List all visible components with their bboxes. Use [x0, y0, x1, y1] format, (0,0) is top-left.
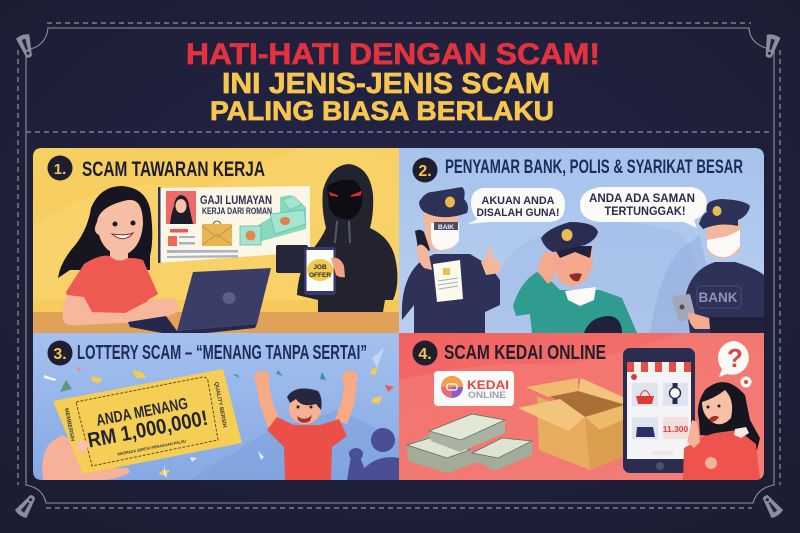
officer with bank uniform: BANK: [698, 290, 738, 305]
job advert card: GAJI LUMAYAN: [200, 193, 272, 207]
smartphone: 11.300: [663, 424, 689, 434]
tablet: job offer: OFFER: [309, 272, 331, 279]
online shop logo: ONLINE: [468, 390, 506, 401]
money stacks: [407, 414, 532, 473]
icon: warning top right: [762, 33, 781, 59]
heading: [48, 340, 367, 366]
laptop: [128, 268, 271, 336]
panel: scam tawaran kerja: [33, 148, 399, 336]
officer with phone: BAIK: [438, 224, 454, 231]
winning ticket: RM 1,000,000!: [86, 407, 210, 453]
heading: SCAM TAWARAN KERJA: [82, 158, 265, 181]
panel: lottery scam: [33, 333, 399, 480]
title: HATI-HATI DENGAN SCAM!: [186, 38, 600, 71]
cardboard box: [518, 378, 623, 470]
heading: [412, 340, 606, 366]
winning ticket: MEMBERSIH: [63, 408, 75, 442]
officer with bank uniform: [671, 199, 764, 333]
speech bubble: saman: [580, 187, 707, 228]
heading: [412, 157, 743, 182]
question mark bubble: [718, 341, 752, 388]
speech bubble: akuan: DISALAH GUNA!: [476, 207, 560, 219]
winning ticket: QUALITY BERSIH: [213, 381, 227, 428]
title: [186, 38, 600, 126]
job advert card: KERJA DARI ROMAN: [202, 206, 272, 216]
heading: 3.: [53, 346, 67, 363]
winning ticket: ANDA MENANG: [95, 395, 189, 430]
speech bubble: akuan: AKUAN ANDA: [482, 195, 555, 207]
question mark bubble: ?: [727, 343, 743, 373]
confused woman: [683, 382, 760, 480]
winning ticket: WASPADA SERTAI PERADUAN PALSU: [117, 438, 187, 457]
panel: scam kedai online: [399, 333, 764, 480]
heading: [48, 156, 265, 181]
silhouette: [347, 428, 399, 480]
title: PALING BIASA BERLAKU: [210, 96, 554, 126]
winning ticket: [53, 369, 242, 474]
table: [33, 312, 399, 333]
speech bubble: saman: TERTUNGGAK!: [604, 206, 686, 218]
panel: penyamar bank: [399, 148, 764, 333]
icon: warning bottom right: [759, 492, 784, 519]
smartphone: [623, 348, 695, 473]
speech bubble: saman: ANDA ADA SAMAN: [589, 193, 695, 205]
title: INI JENIS-JENIS SCAM: [222, 68, 550, 100]
icon: warning bottom left: [14, 492, 39, 519]
woman at laptop: [58, 186, 180, 325]
officer with phone: [402, 187, 500, 333]
heading: 4.: [418, 346, 432, 363]
cheering boy: [254, 370, 358, 480]
confetti: [44, 348, 394, 478]
job advert card: [158, 186, 310, 263]
tablet: job offer: [304, 247, 345, 295]
money notes: [240, 195, 306, 245]
heading: SCAM KEDAI ONLINE: [444, 342, 606, 364]
hooded scammer: [297, 164, 397, 312]
heading: 1.: [54, 161, 66, 178]
thumb: [76, 440, 88, 452]
online shop logo: KEDAI: [467, 378, 509, 392]
black wallet: [276, 245, 308, 273]
heading: LOTTERY SCAM – “MENANG TANPA SERTAI”: [77, 342, 367, 364]
heading: 2.: [418, 163, 432, 180]
speech bubble: akuan: [468, 188, 565, 224]
tablet: job offer: JOB: [313, 264, 327, 271]
icon: warning top left: [15, 33, 36, 60]
hand: [42, 435, 130, 480]
worried man: [513, 222, 637, 333]
online shop logo: [434, 371, 514, 406]
